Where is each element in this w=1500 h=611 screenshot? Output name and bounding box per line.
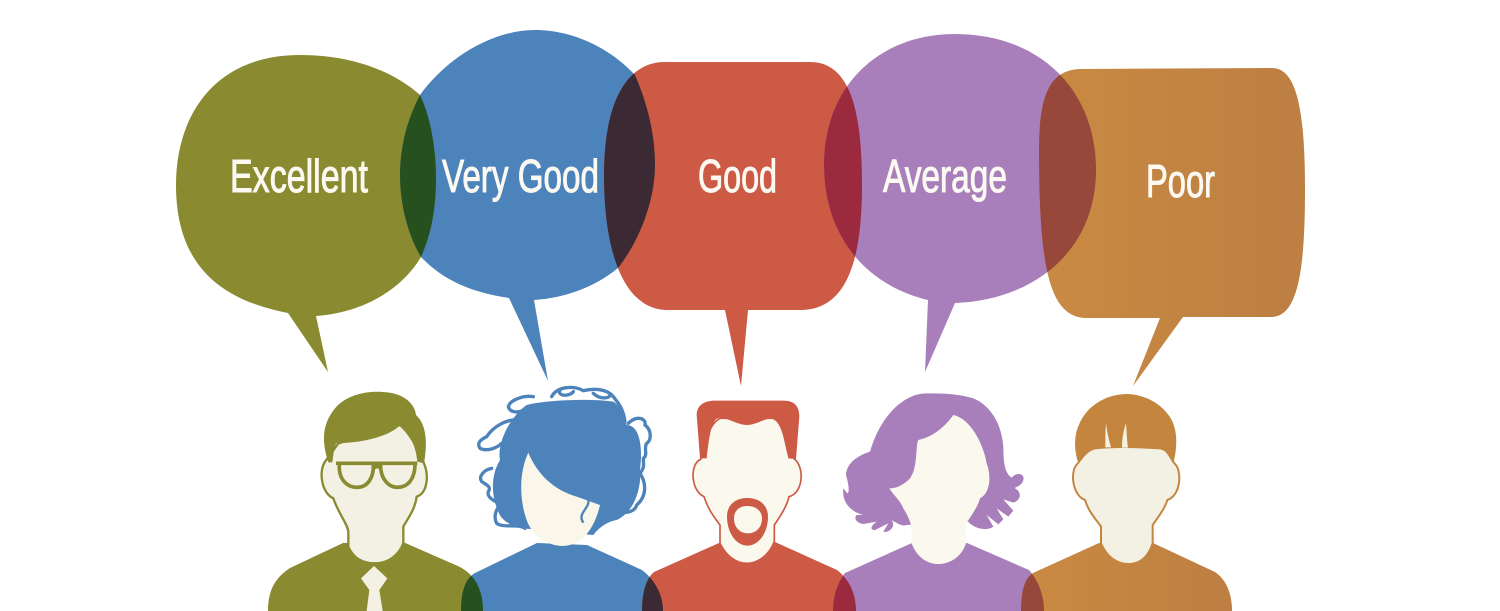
speech bubble: Good: [604, 62, 855, 386]
glasses: [336, 463, 417, 487]
label: Good: Good: [698, 150, 777, 202]
wavy hair: [843, 393, 1024, 532]
face: [693, 418, 801, 563]
face: [322, 425, 427, 563]
fringe slits: [1105, 423, 1128, 448]
person: man with glasses and tie: [268, 392, 483, 611]
overlap: Excellent and Very Good: [400, 95, 436, 257]
stray curl on face: [581, 500, 588, 523]
person: person with fringe: [1021, 394, 1232, 611]
face: [889, 415, 989, 564]
curls: [479, 387, 650, 528]
speech bubble: Excellent: [176, 55, 436, 372]
hair: [1075, 394, 1176, 463]
label: Poor: Poor: [1146, 155, 1215, 207]
overlap: Average and Poor: [1039, 74, 1096, 272]
speech bubble: Very Good: [400, 30, 634, 381]
overlap: Very Good and Good: [604, 74, 655, 268]
label: Average: Average: [883, 150, 1007, 202]
speech bubble: Poor: [1039, 68, 1305, 386]
person: man with goatee: [642, 400, 843, 611]
face: [521, 453, 600, 546]
person: woman with curly hair: [461, 386, 652, 611]
body overlap: [1021, 574, 1044, 611]
goatee: [727, 498, 768, 546]
person: woman with wavy hair: [833, 393, 1032, 611]
overlap: Good and Average: [824, 86, 862, 256]
label: Excellent: Excellent: [230, 150, 368, 202]
hair: [697, 401, 799, 459]
speech bubble: Average: [824, 34, 1060, 372]
curly hair: [493, 400, 641, 535]
label: Very Good: Very Good: [442, 150, 599, 202]
body overlap: [833, 576, 856, 611]
face: [1073, 447, 1179, 564]
body overlap: [461, 576, 483, 611]
body overlap: [642, 577, 663, 611]
hair: [324, 392, 426, 463]
tie: [361, 566, 387, 611]
